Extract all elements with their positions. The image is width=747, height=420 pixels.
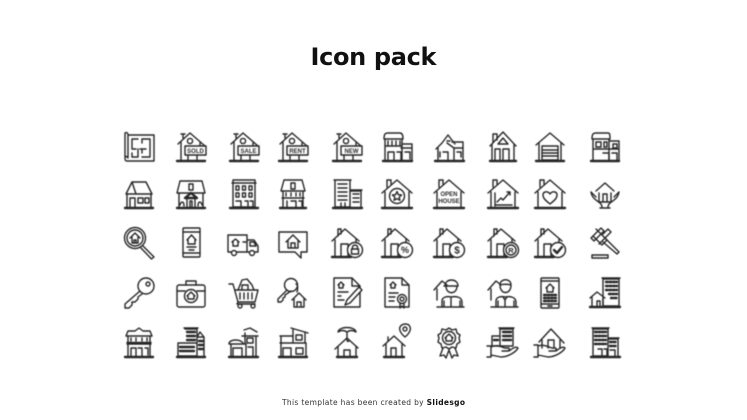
icon: townhouse — [280, 180, 306, 208]
icon: moving truck — [228, 235, 258, 256]
icon: garage — [536, 133, 564, 161]
icon: modern house — [279, 328, 308, 357]
icon: agent and house — [488, 280, 518, 307]
icon: house with star — [382, 180, 412, 208]
icon: tower and house — [590, 278, 620, 307]
icon: auction gavel — [591, 228, 619, 258]
icon: house with percent — [382, 229, 412, 258]
icon row 1 — [125, 132, 619, 161]
icon: house sold sign — [177, 133, 206, 161]
icon: open house: HOUSE — [438, 199, 460, 205]
icon: house with registered seal — [488, 229, 518, 258]
icon: mobile house listing — [541, 278, 559, 308]
icon: house with registered seal: R — [508, 246, 514, 255]
icon: hands holding house — [591, 183, 619, 208]
icon: open house: OPEN — [440, 192, 458, 198]
icon: apartment block — [230, 180, 258, 208]
footer credit: This template has been created by Slidesgo — [281, 398, 465, 407]
icon: cottage — [125, 182, 153, 208]
icon: house sold sign: SOLD — [187, 149, 204, 155]
icon row 3 — [124, 228, 619, 259]
icon: house with dollar: $ — [454, 246, 460, 256]
icon: two storey block — [591, 133, 619, 161]
icon: house new sign: NEW — [344, 149, 359, 155]
icon: house with percent: % — [401, 245, 409, 255]
icon: suburban house — [435, 135, 464, 161]
icon row 2 — [125, 180, 619, 208]
icon: house with side garage — [229, 328, 258, 357]
icon: house rent sign: RENT — [289, 149, 306, 155]
icon: house with heart — [535, 180, 565, 208]
icon: shopping cart with house — [229, 279, 258, 308]
icon row 4 — [125, 278, 620, 308]
icon: magnifier with house — [124, 228, 154, 259]
icon: house sale sign: SALE — [240, 149, 257, 155]
title: Icon pack — [310, 43, 438, 71]
icon: office towers — [333, 180, 362, 208]
icon: open house — [434, 180, 464, 208]
icon: detached house with gable — [490, 132, 516, 161]
icon: house with rising chart — [488, 180, 518, 208]
icon: townhouse with annex — [383, 133, 412, 161]
icon: house with dollar — [434, 229, 464, 258]
icon: city block — [177, 328, 205, 357]
icon: victorian house — [125, 328, 153, 357]
icon: house with check mark — [535, 229, 566, 258]
icon: contract with pen — [334, 278, 362, 307]
icon: briefcase house — [177, 281, 205, 307]
icon: certificate with seal — [385, 278, 409, 308]
icon: house rent sign — [279, 133, 308, 161]
icon: hand holding house — [534, 329, 565, 357]
icon: twin apartment towers — [591, 328, 620, 357]
icon: key — [125, 278, 154, 308]
icon: hand holding buildings — [487, 328, 518, 357]
icon: key with house tag — [278, 278, 306, 307]
icon: house with map pin — [383, 324, 410, 357]
icon: speech bubble house — [279, 232, 307, 258]
icon: house new sign — [333, 133, 362, 161]
icon: tablet house — [183, 228, 200, 257]
icon: floor plan — [125, 133, 154, 161]
icon: house sale sign — [230, 133, 259, 161]
icon: award rosette house — [438, 328, 460, 358]
icon: house with padlock — [332, 229, 362, 258]
icon row 5 — [125, 324, 620, 358]
icon: mansion — [177, 181, 205, 208]
icon: house with umbrella — [335, 328, 358, 357]
icon: builder and house — [434, 280, 464, 307]
